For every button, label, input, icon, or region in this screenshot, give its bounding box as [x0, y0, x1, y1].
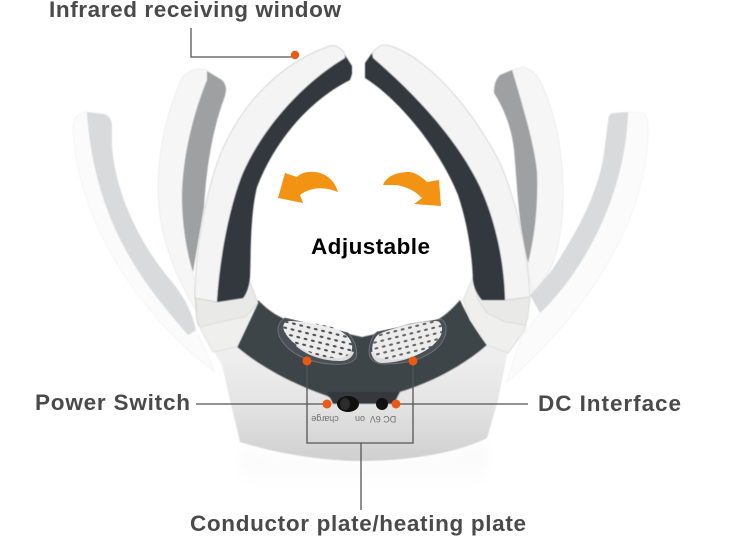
arrow right — [383, 172, 441, 206]
switch recess — [327, 392, 400, 404]
ghost arm outer right — [507, 112, 648, 382]
left plate — [283, 321, 352, 358]
main arm right — [365, 45, 530, 300]
base body — [204, 335, 522, 461]
joint left — [195, 277, 258, 352]
label: adjustable: Adjustable — [311, 234, 430, 259]
ghost arm middle left — [158, 69, 226, 312]
upside-down port labels — [311, 414, 396, 424]
left arm shell — [195, 46, 345, 302]
main arm left — [195, 46, 352, 302]
dark collar — [237, 300, 487, 401]
heating plates — [278, 318, 446, 364]
right arm shell — [372, 45, 530, 300]
label: power switch: Power Switch — [35, 390, 190, 415]
joint right — [463, 277, 530, 353]
power switch — [337, 396, 359, 412]
label: conductor plate: Conductor plate/heating plate — [190, 511, 526, 536]
ghost arm outer left — [73, 112, 215, 372]
marker dots — [291, 51, 418, 409]
left plate surround — [278, 318, 357, 364]
upside-down port labels: charge — [311, 414, 339, 424]
left arm dark band — [217, 55, 352, 302]
upside-down port labels: DC 6V — [370, 414, 396, 424]
upside-down port labels: on — [355, 414, 365, 424]
right arm dark band — [365, 53, 505, 300]
ghost arm middle right — [494, 67, 563, 292]
DC socket — [376, 398, 388, 410]
base reflection — [240, 444, 490, 490]
right plate rim — [371, 340, 433, 363]
arrow left — [278, 172, 338, 203]
leader lines — [191, 28, 528, 510]
device base — [204, 300, 522, 461]
right plate surround — [369, 319, 446, 364]
left plate rim — [296, 340, 354, 361]
right plate — [372, 321, 442, 359]
label: DC interface: DC Interface — [538, 391, 681, 416]
